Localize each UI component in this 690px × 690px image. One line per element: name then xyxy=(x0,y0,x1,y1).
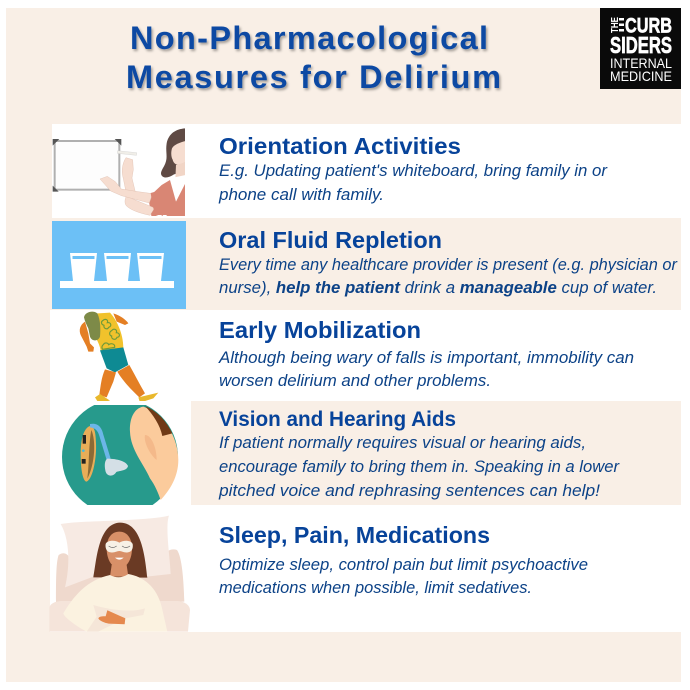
icon: woman at whiteboard xyxy=(53,128,185,218)
description: Every time any healthcare provider is present (e.g. physician or xyxy=(219,256,678,274)
heading: Vision and Hearing Aids xyxy=(219,407,456,431)
description: encourage family to bring them in. Speaking in a lower xyxy=(219,458,621,476)
row 2 panel: oral fluid repletion xyxy=(52,221,678,309)
description xyxy=(218,162,609,204)
icon: woman sleeping with eye mask xyxy=(49,516,190,632)
description xyxy=(218,434,621,500)
row 4 white area behind hearing aid icon xyxy=(50,401,191,505)
logo: The Curb Siders Internal Medicine: MEDICINE xyxy=(610,68,672,84)
row 3 panel: early mobilization xyxy=(50,310,681,403)
logo: The Curb Siders Internal Medicine xyxy=(600,8,681,89)
logo: The Curb Siders Internal Medicine: CURB xyxy=(625,14,672,38)
title: Measures for Delirium xyxy=(126,59,501,95)
row 4 panel: vision and hearing aids xyxy=(62,405,620,505)
heading: Early Mobilization xyxy=(219,317,421,343)
icon: walking man xyxy=(80,312,158,403)
title xyxy=(126,20,501,95)
heading: Sleep, Pain, Medications xyxy=(219,522,490,548)
title: Non-Pharmacological xyxy=(130,20,488,56)
description xyxy=(219,556,588,597)
description: Optimize sleep, control pain but limit psychoactive xyxy=(219,556,588,574)
heading: Oral Fluid Repletion xyxy=(219,227,442,253)
heading: Orientation Activities xyxy=(219,133,461,159)
description: E.g. Updating patient's whiteboard, bring family in or xyxy=(219,162,609,180)
icon: three glasses of water on a tray xyxy=(52,221,186,309)
description: nurse), help the patient drink a manageable cup of water. xyxy=(219,279,657,297)
description: Although being wary of falls is important, immobility can xyxy=(218,349,634,367)
description: medications when possible, limit sedatives. xyxy=(219,579,532,597)
description: pitched voice and rephrasing sentences can help! xyxy=(218,482,600,500)
description: If patient normally requires visual or hearing aids, xyxy=(219,434,586,452)
description: worsen delirium and other problems. xyxy=(219,372,491,390)
logo: The Curb Siders Internal Medicine: THE xyxy=(609,17,621,33)
description: phone call with family. xyxy=(218,186,384,204)
icon: ear with hearing aid xyxy=(62,405,178,505)
logo: The Curb Siders Internal Medicine: INTERNAL xyxy=(610,55,672,71)
row 1 panel: orientation activities xyxy=(52,124,681,218)
row 5 panel: sleep, pain, medications xyxy=(49,505,681,632)
description xyxy=(218,349,634,390)
description xyxy=(219,256,678,297)
